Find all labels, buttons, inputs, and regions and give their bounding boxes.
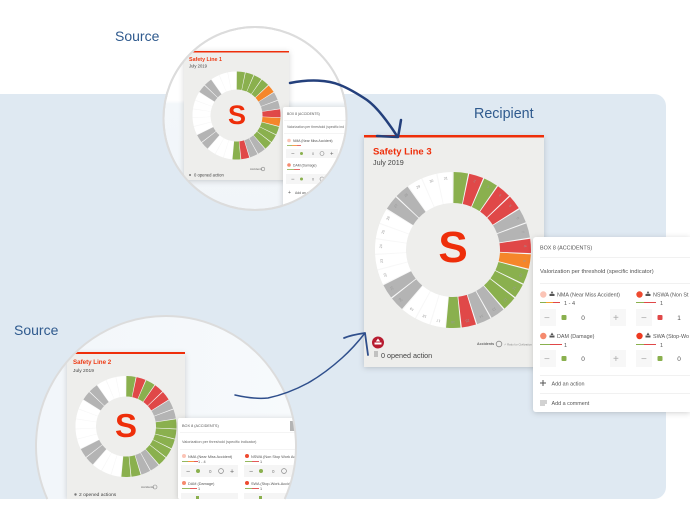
indicator: SWA <box>636 332 690 367</box>
indicator: SWA: 1 <box>660 343 663 349</box>
segment numbers: 16 <box>451 320 455 324</box>
indicator: NSWA <box>636 291 690 326</box>
source 2 popup: − <box>186 468 190 476</box>
segment numbers: 3 <box>486 185 490 189</box>
center letter S: S <box>438 223 468 272</box>
source 2 card: S <box>115 407 137 444</box>
segment numbers: 10 <box>518 272 523 278</box>
segment numbers: 14 <box>479 314 484 319</box>
source 1 popup: BOX 8 (ACCIDENTS) <box>287 112 320 116</box>
source 2 popup: Valorization per threshold (specific indicator) <box>182 440 257 444</box>
source 2 popup <box>178 418 308 499</box>
segment numbers: 28 <box>403 193 409 198</box>
source 2 popup: 1 <box>260 487 262 491</box>
source 1 popup: Add an action <box>295 191 316 195</box>
heading: source 2: Source <box>14 322 59 338</box>
source 2 popup: + <box>230 468 234 476</box>
source 1 popup: − <box>291 177 295 183</box>
segment numbers: 19 <box>409 306 415 312</box>
heading: recipient: Recipient <box>474 106 534 122</box>
source 2 card: July 2019 <box>73 368 94 374</box>
legend: accidents <box>477 341 532 347</box>
source 2 popup: − <box>249 468 253 476</box>
segment numbers: 24 <box>379 244 383 248</box>
segment numbers: 22 <box>383 272 388 278</box>
source 2 donut <box>86 386 166 467</box>
segment numbers: 5 <box>508 204 512 208</box>
add a comment: Add a comment <box>552 401 590 407</box>
segment numbers: 18 <box>422 314 427 319</box>
card date: July 2019 <box>373 158 404 167</box>
source 1 card: S <box>228 100 246 130</box>
segment numbers: 6 <box>515 217 520 220</box>
indicator: DAM: − <box>544 354 550 365</box>
source 1 popup: 0 <box>312 178 314 182</box>
segment numbers: 11 <box>511 285 517 291</box>
segment numbers: 25 <box>381 230 386 234</box>
segment numbers: 2 <box>473 179 476 184</box>
add an action: Add an action <box>552 382 584 388</box>
segment numbers: 12 <box>502 297 508 302</box>
arrow: source 2 to recipient <box>235 333 368 398</box>
source 1 donut <box>202 80 272 150</box>
source 1 popup: Valorization per threshold (specific ind <box>287 125 344 129</box>
segment numbers: 8 <box>523 245 527 247</box>
indicator: NMA: NMA (Near Miss Accident) <box>557 293 620 299</box>
segment numbers: 4 <box>498 193 502 198</box>
legend: accidents: Accidents <box>477 342 494 346</box>
source 1 popup <box>280 106 346 205</box>
indicator: NMA: + <box>613 313 619 324</box>
indicator: DAM: DAM (Damage) <box>557 334 595 340</box>
source 2 popup: 0 <box>272 469 275 474</box>
indicator: NSWA: 1 <box>677 315 681 322</box>
source 2 card <box>67 352 185 499</box>
heading: source 1: Source <box>115 28 160 44</box>
source 1 card: July 2019 <box>189 64 208 68</box>
source 1 popup: NMA (Near Miss Accident) <box>293 139 333 143</box>
source 1 popup: DAM (Damage) <box>293 164 317 168</box>
indicator: DAM: 0 <box>581 356 585 363</box>
segment numbers: 31 <box>444 176 448 181</box>
source 2 popup: NMA (Near Miss Accident) <box>188 455 233 459</box>
segment numbers: 26 <box>386 216 391 221</box>
segment numbers: 30 <box>429 179 434 184</box>
recipient popup: box 8 <box>533 237 690 412</box>
source 2 popup: 0 <box>209 469 212 474</box>
segment numbers: 7 <box>521 231 525 233</box>
indicator: NMA: 1 - 4 <box>564 301 575 307</box>
indicator: DAM: 1 <box>564 343 567 349</box>
indicator: SWA: 0 <box>677 356 681 363</box>
segment numbers: 1 <box>459 176 461 180</box>
indicator: NMA: − <box>544 313 550 324</box>
segment numbers: 17 <box>436 318 441 323</box>
indicator: NMA <box>540 291 626 326</box>
source 2 popup: DAM (Damage) <box>188 482 215 486</box>
indicator: SWA: SWA (Stop-Wo <box>653 334 689 340</box>
indicator: NSWA: − <box>641 313 647 324</box>
source 2 card: Accidents <box>141 485 155 489</box>
legend: accidents: ✓ Ratio for Civilization <box>504 342 532 346</box>
source 1 magnifier circle <box>164 27 363 217</box>
segment numbers: 20 <box>398 297 404 302</box>
source 2 card: 2 opened actions <box>79 492 117 498</box>
source 2 magnifier circle <box>36 316 308 499</box>
indicator: NMA: 0 <box>581 315 585 322</box>
arrow: source 1 to recipient <box>290 81 401 137</box>
source 2 popup: 1 - 4 <box>198 460 206 464</box>
segment numbers: 15 <box>465 318 470 323</box>
segment numbers <box>379 176 527 324</box>
source 2 popup: 1 <box>198 487 200 491</box>
recipient popup: box 8: Valorization per threshold (specific indicator) <box>540 269 654 275</box>
background panel <box>0 94 666 499</box>
recipient donut chart <box>390 188 516 312</box>
indicator: DAM: + <box>613 354 619 365</box>
opened actions count: 0 opened action <box>381 351 432 360</box>
indicator: NSWA: 1 <box>660 301 663 307</box>
source 1 card <box>184 51 289 180</box>
segment numbers: 9 <box>522 260 526 262</box>
source 1 popup: − <box>291 152 295 158</box>
source 1 card: 0 opened action <box>194 172 224 178</box>
segment numbers: 29 <box>415 184 421 190</box>
indicator: NSWA: NSWA (Non St <box>653 293 689 299</box>
source 2 popup: 1 <box>260 460 262 464</box>
indicator: SWA: − <box>641 354 647 365</box>
recipient card <box>364 135 544 367</box>
source 1 popup: 0 <box>312 152 314 156</box>
add an action <box>540 380 584 388</box>
source 2 card: Safety Line 2 <box>73 359 112 366</box>
source 2 popup: SWA (Stop-Work-Acciden <box>251 482 294 486</box>
source 1 card: Safety Line 1 <box>189 57 222 63</box>
segment numbers: 21 <box>389 285 395 291</box>
segment numbers: 23 <box>380 259 384 263</box>
source 1 popup: + <box>330 152 334 158</box>
indicator: DAM <box>540 332 626 367</box>
source 2 popup: NSWA (Non Stop Work Acc <box>251 455 297 459</box>
card title: Safety Line 3 <box>373 146 432 158</box>
source 2 popup: BOX 8 (ACCIDENTS) <box>182 424 219 428</box>
source 1 popup: + <box>288 190 291 196</box>
icon: red warning badge <box>372 336 384 348</box>
segment numbers: 13 <box>491 306 497 312</box>
recipient popup: box 8: BOX 8 (ACCIDENTS) <box>540 246 592 252</box>
source 1 card: Accidents <box>250 167 263 171</box>
segment numbers: 27 <box>393 203 399 209</box>
